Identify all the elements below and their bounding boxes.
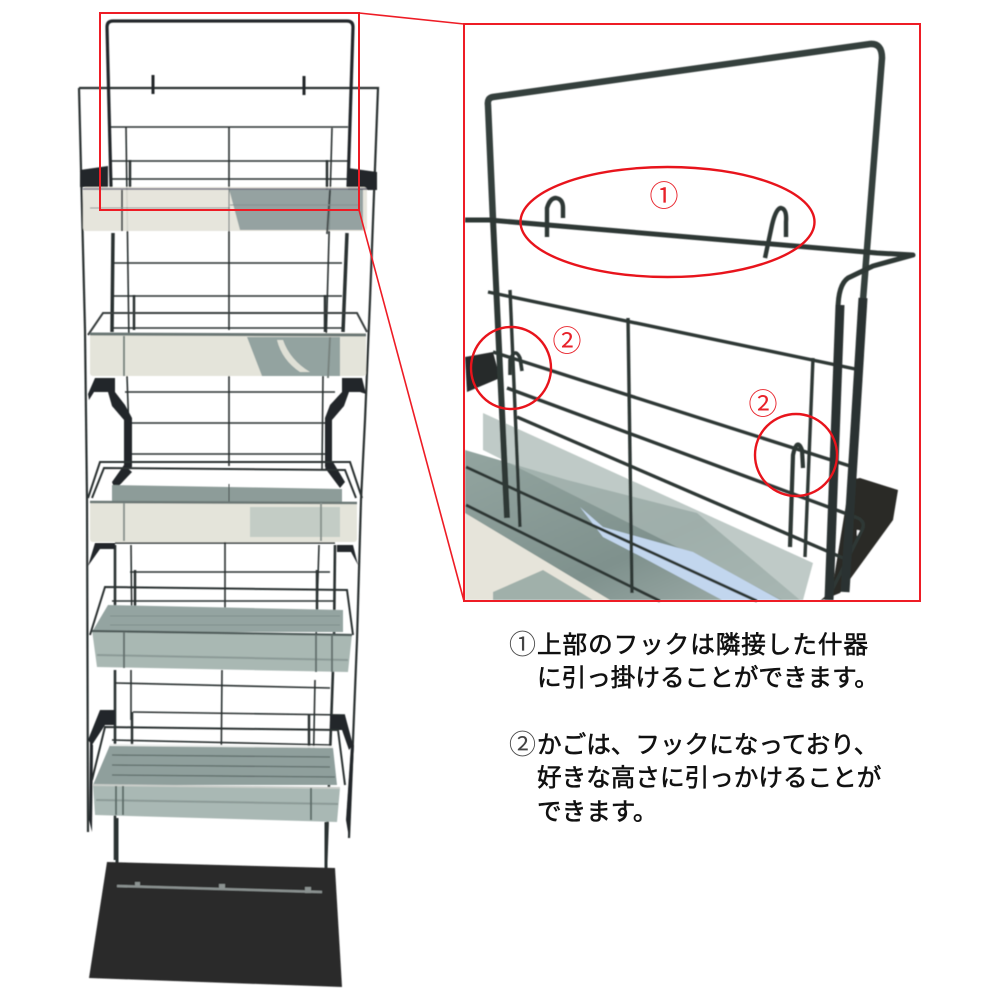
zoomed green patch	[493, 570, 593, 600]
marker 2 left: ②	[552, 326, 582, 358]
note 2: できます。	[537, 799, 658, 826]
callout 2 left circle	[471, 327, 551, 409]
note 1: 上部のフックは隣接した什器	[537, 631, 868, 659]
red highlight box on rack	[100, 13, 359, 210]
note 2: ②	[509, 730, 536, 760]
zoomed top frame	[488, 44, 882, 300]
zoomed tray rails	[466, 467, 757, 601]
product photo: full rack	[79, 21, 378, 987]
callout 2 right circle	[755, 414, 837, 496]
note 2: 好きな高さに引っかけることが	[537, 764, 881, 792]
zoomed basket hooks	[510, 353, 803, 547]
note 2: かごは、フックになっており、	[537, 731, 878, 759]
zoomed blue reflection	[580, 507, 780, 600]
marker 2 right: ②	[748, 389, 778, 421]
top hooks	[153, 75, 304, 95]
note 1	[509, 630, 879, 692]
zoomed top hooks	[547, 198, 786, 258]
zoomed black corner bracket	[820, 478, 898, 601]
zoomed cream tray front	[465, 513, 610, 600]
zoomed glass lip	[483, 413, 813, 600]
marker 1: ①	[649, 181, 679, 213]
note 1: に引っ掛けることができます。	[537, 664, 879, 692]
tray 1	[83, 187, 367, 234]
note 2	[509, 730, 881, 826]
note 1: ①	[509, 630, 536, 660]
zoomed basket wires	[488, 220, 863, 593]
panel: zoomed detail	[465, 44, 913, 601]
black brackets	[80, 166, 377, 838]
zoomed front column	[829, 305, 840, 600]
tray 3	[88, 462, 362, 542]
tray 5	[92, 727, 345, 822]
tray 2	[88, 313, 367, 378]
connector lines	[359, 13, 464, 601]
rack wires	[79, 88, 378, 868]
top hanging frame	[107, 21, 353, 187]
zoomed left black bracket	[465, 352, 500, 392]
callout 1 ellipse	[520, 167, 814, 277]
zoomed right column	[845, 298, 863, 592]
zoomed floor of tray	[465, 450, 800, 600]
zoomed panel border	[464, 24, 920, 601]
rack base	[89, 862, 342, 987]
zoomed crossbar and side return	[465, 220, 913, 310]
tray 4	[90, 587, 353, 672]
